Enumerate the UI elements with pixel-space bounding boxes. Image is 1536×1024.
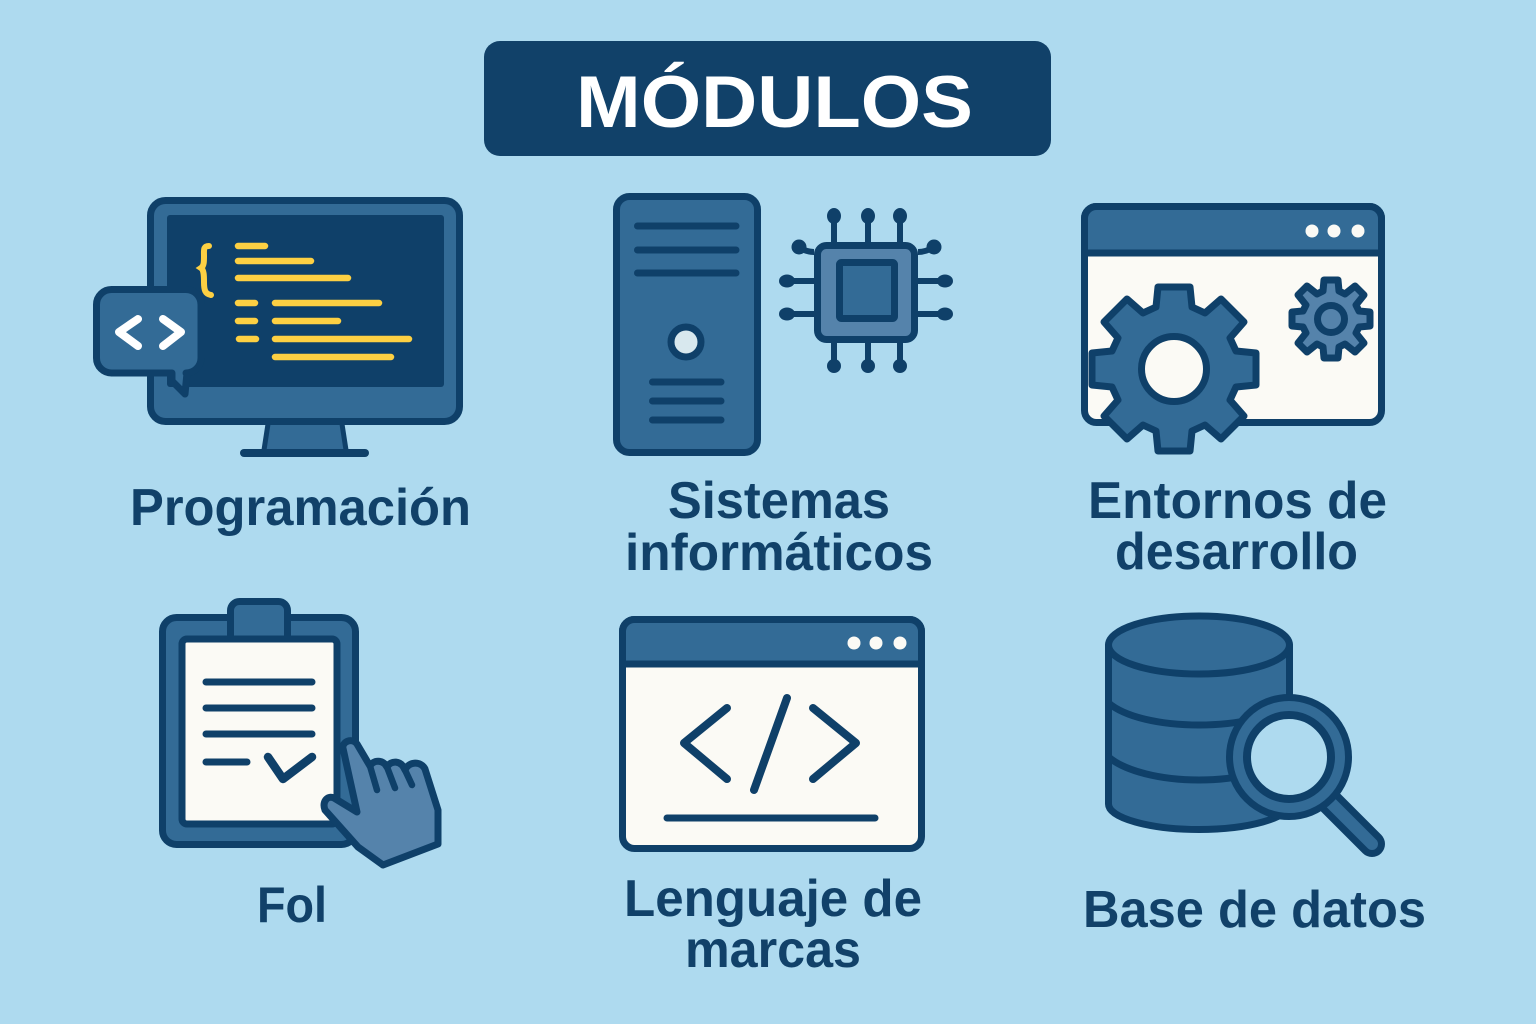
- panel: Base de datos: [1083, 616, 1426, 939]
- icon: markup code window: [622, 620, 922, 848]
- label: Lenguaje de marcas: Lenguaje de: [624, 870, 922, 928]
- icon: magnifying glass: [1230, 698, 1372, 844]
- icon: pointing hand: [324, 741, 438, 865]
- panel: Programación: [96, 200, 471, 537]
- panel: Entornos de desarrollo: [1084, 206, 1387, 581]
- label: Base de datos: Base de datos: [1083, 881, 1426, 939]
- icon: PC tower: [616, 196, 758, 452]
- icon: database cylinder: [1108, 616, 1290, 830]
- label: Fol: Fol: [257, 877, 327, 933]
- label: Entornos de desarrollo: desarrollo: [1115, 523, 1358, 581]
- icon: computer monitor with code: [96, 200, 460, 457]
- panel: Fol: [162, 602, 438, 933]
- label: Sistemas informáticos: [625, 472, 933, 582]
- icon: large gear: [1092, 287, 1256, 451]
- label: Sistemas informáticos: informáticos: [625, 524, 933, 582]
- label: Programación: Programación: [130, 479, 471, 537]
- icon: microchip: [779, 208, 953, 373]
- title text: MÓDULOS: [576, 62, 973, 143]
- icon: application window with gears: [1084, 206, 1382, 451]
- label: Entornos de desarrollo: Entornos de: [1088, 472, 1387, 530]
- panel: Sistemas informáticos: [616, 196, 953, 582]
- panel: Lenguaje de marcas: [622, 620, 922, 979]
- icon: code speech bubble: [96, 289, 201, 394]
- icon: clipboard with pointing hand: [162, 602, 438, 865]
- label: Lenguaje de marcas: marcas: [685, 921, 861, 979]
- icon: small gear: [1292, 280, 1370, 358]
- label: Sistemas informáticos: Sistemas: [668, 472, 890, 530]
- label: Lenguaje de marcas: [624, 870, 922, 979]
- title banner: [484, 41, 1051, 156]
- label: Entornos de desarrollo: [1088, 472, 1387, 581]
